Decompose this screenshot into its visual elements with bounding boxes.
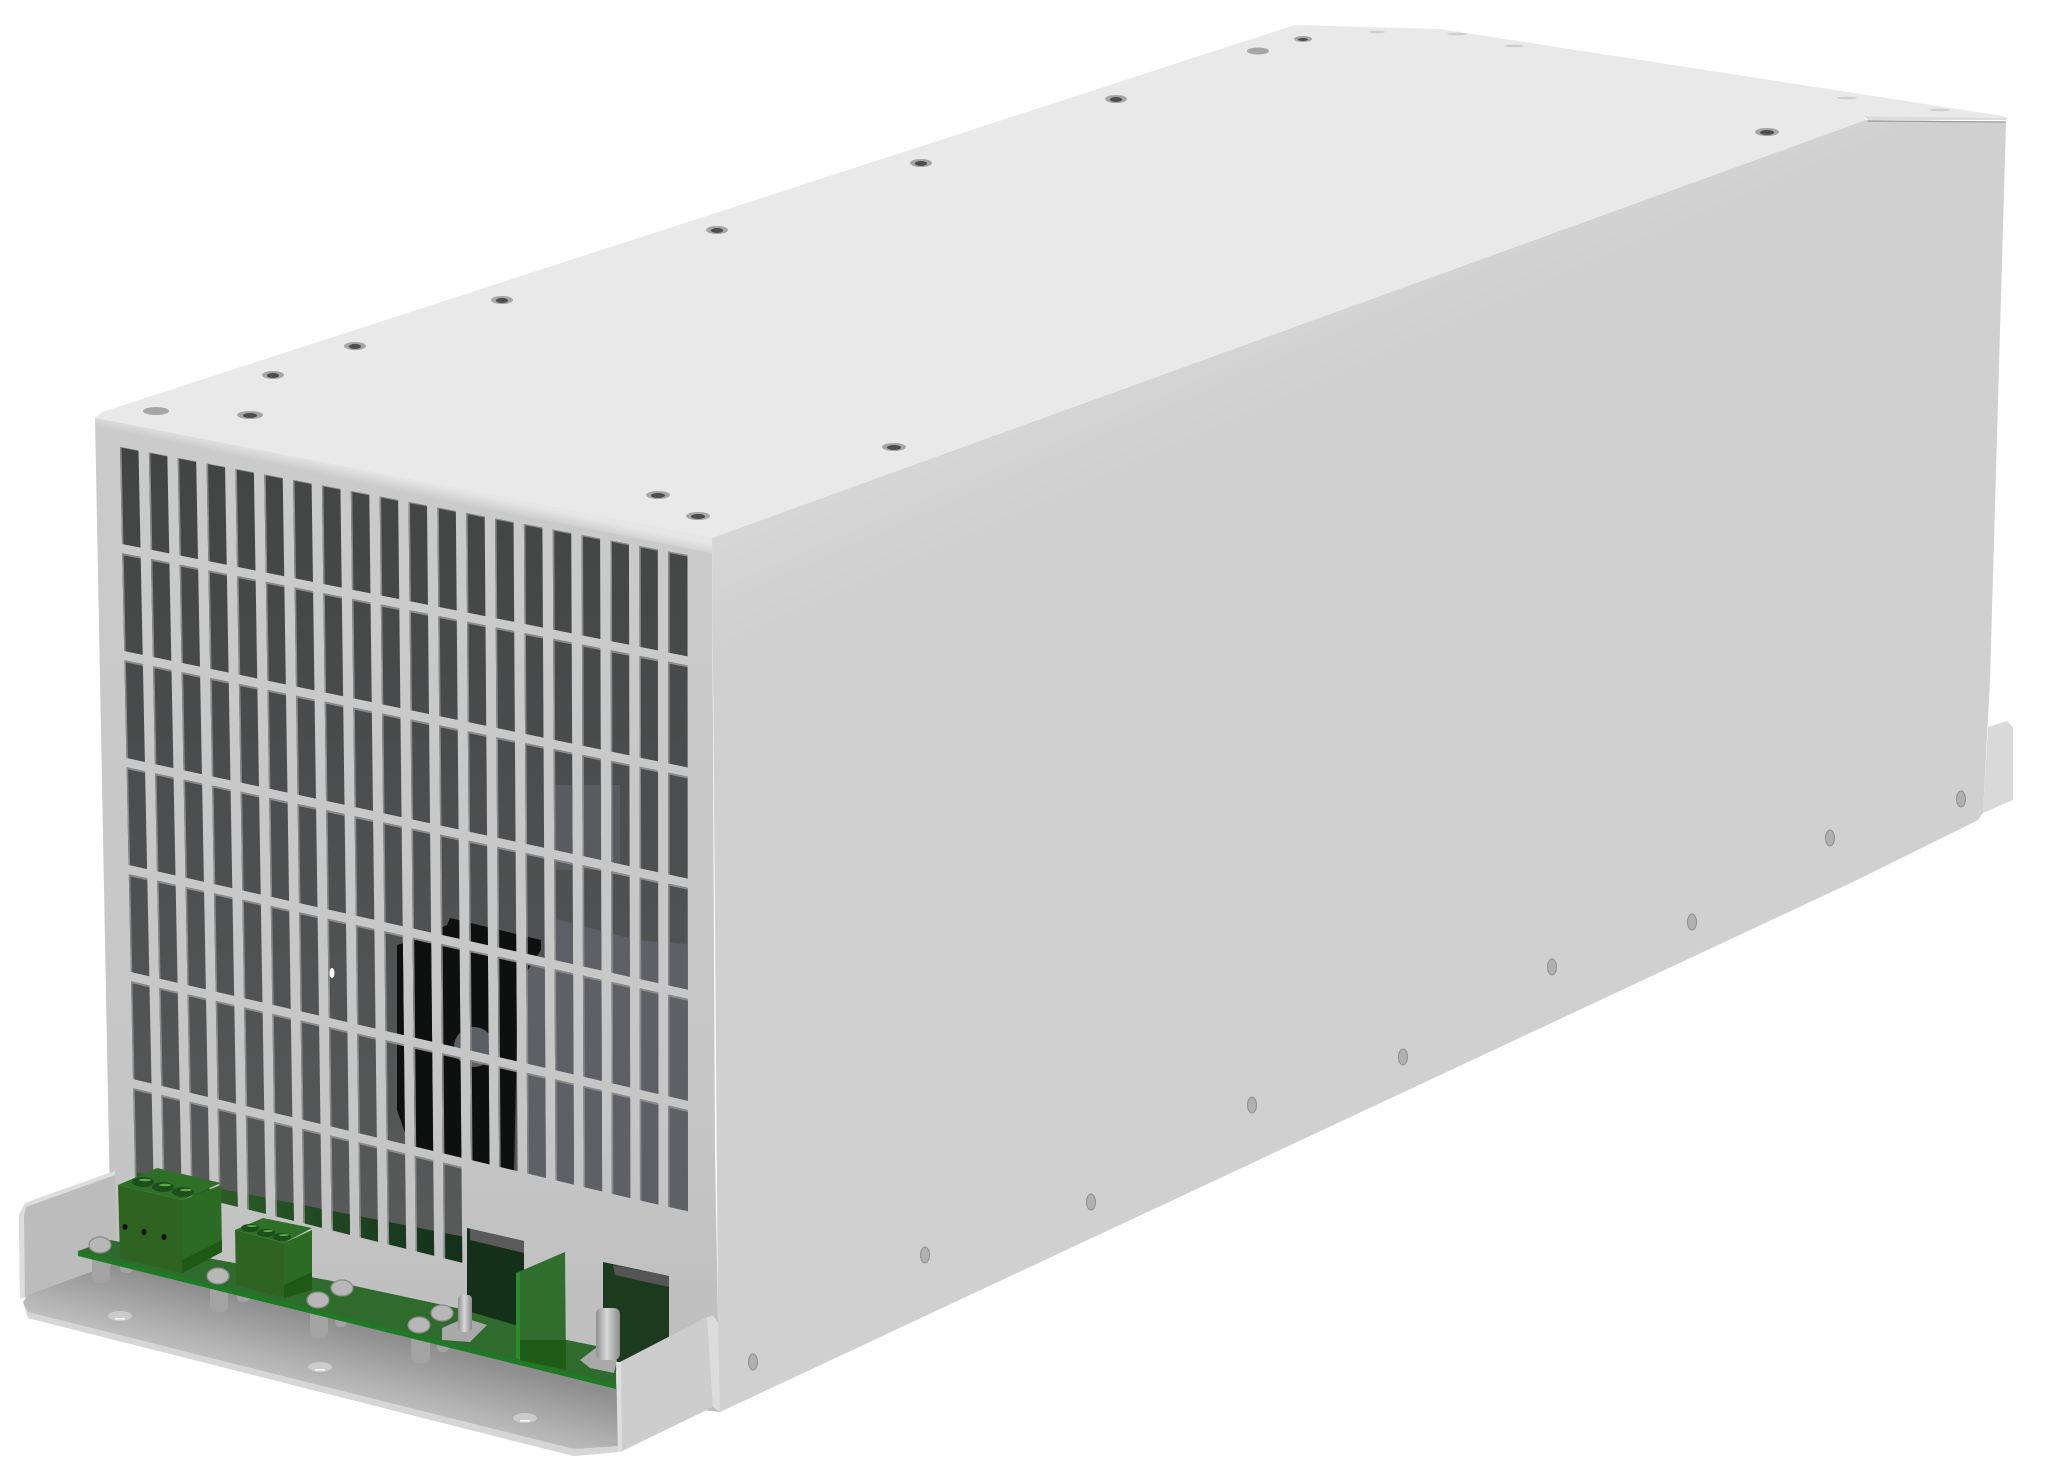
board screws bbox=[89, 1237, 453, 1333]
ground pin right bbox=[580, 1308, 620, 1373]
ground pin left bbox=[442, 1295, 487, 1342]
lit internal panel lower bbox=[526, 918, 688, 1211]
top face bbox=[95, 25, 2007, 538]
terminal block large bbox=[118, 1168, 222, 1273]
mounting tray bbox=[19, 1171, 620, 1456]
slot left bevels bbox=[120, 447, 668, 1328]
standoffs bbox=[92, 1255, 449, 1363]
rear mounting tab bbox=[1983, 721, 2013, 813]
fan hub bbox=[454, 1027, 489, 1067]
right side face bbox=[712, 116, 2007, 1412]
ventilation slots interior bbox=[120, 447, 688, 1263]
slot top bevels bbox=[122, 448, 688, 1169]
vertical daughter board bbox=[516, 1252, 566, 1370]
fan dark region bbox=[397, 918, 541, 1175]
tray front lip bbox=[23, 1302, 618, 1456]
tray left flange bbox=[19, 1171, 118, 1298]
cable cutout left bbox=[467, 1228, 524, 1325]
circuit board bbox=[78, 1240, 616, 1389]
front face bbox=[95, 418, 720, 1412]
top face mounting holes bbox=[143, 36, 1779, 520]
side face screws bbox=[748, 791, 1966, 1370]
top bend highlight bbox=[95, 418, 712, 553]
cable cutout right bbox=[603, 1262, 669, 1370]
glint bbox=[330, 968, 334, 978]
lit internal panel upper bbox=[552, 785, 620, 870]
solid lower front panel bbox=[105, 1160, 720, 1412]
PCB seen through slots bbox=[134, 1172, 462, 1263]
tray floor bbox=[23, 1262, 620, 1456]
terminal block small bbox=[235, 1218, 312, 1298]
rear top fold line bbox=[1863, 116, 2007, 120]
tray right flange bbox=[616, 1316, 720, 1452]
horizontal grille bars bbox=[108, 541, 697, 1224]
tray floor holes bbox=[108, 1311, 537, 1423]
tray flange rim bbox=[19, 1171, 115, 1298]
